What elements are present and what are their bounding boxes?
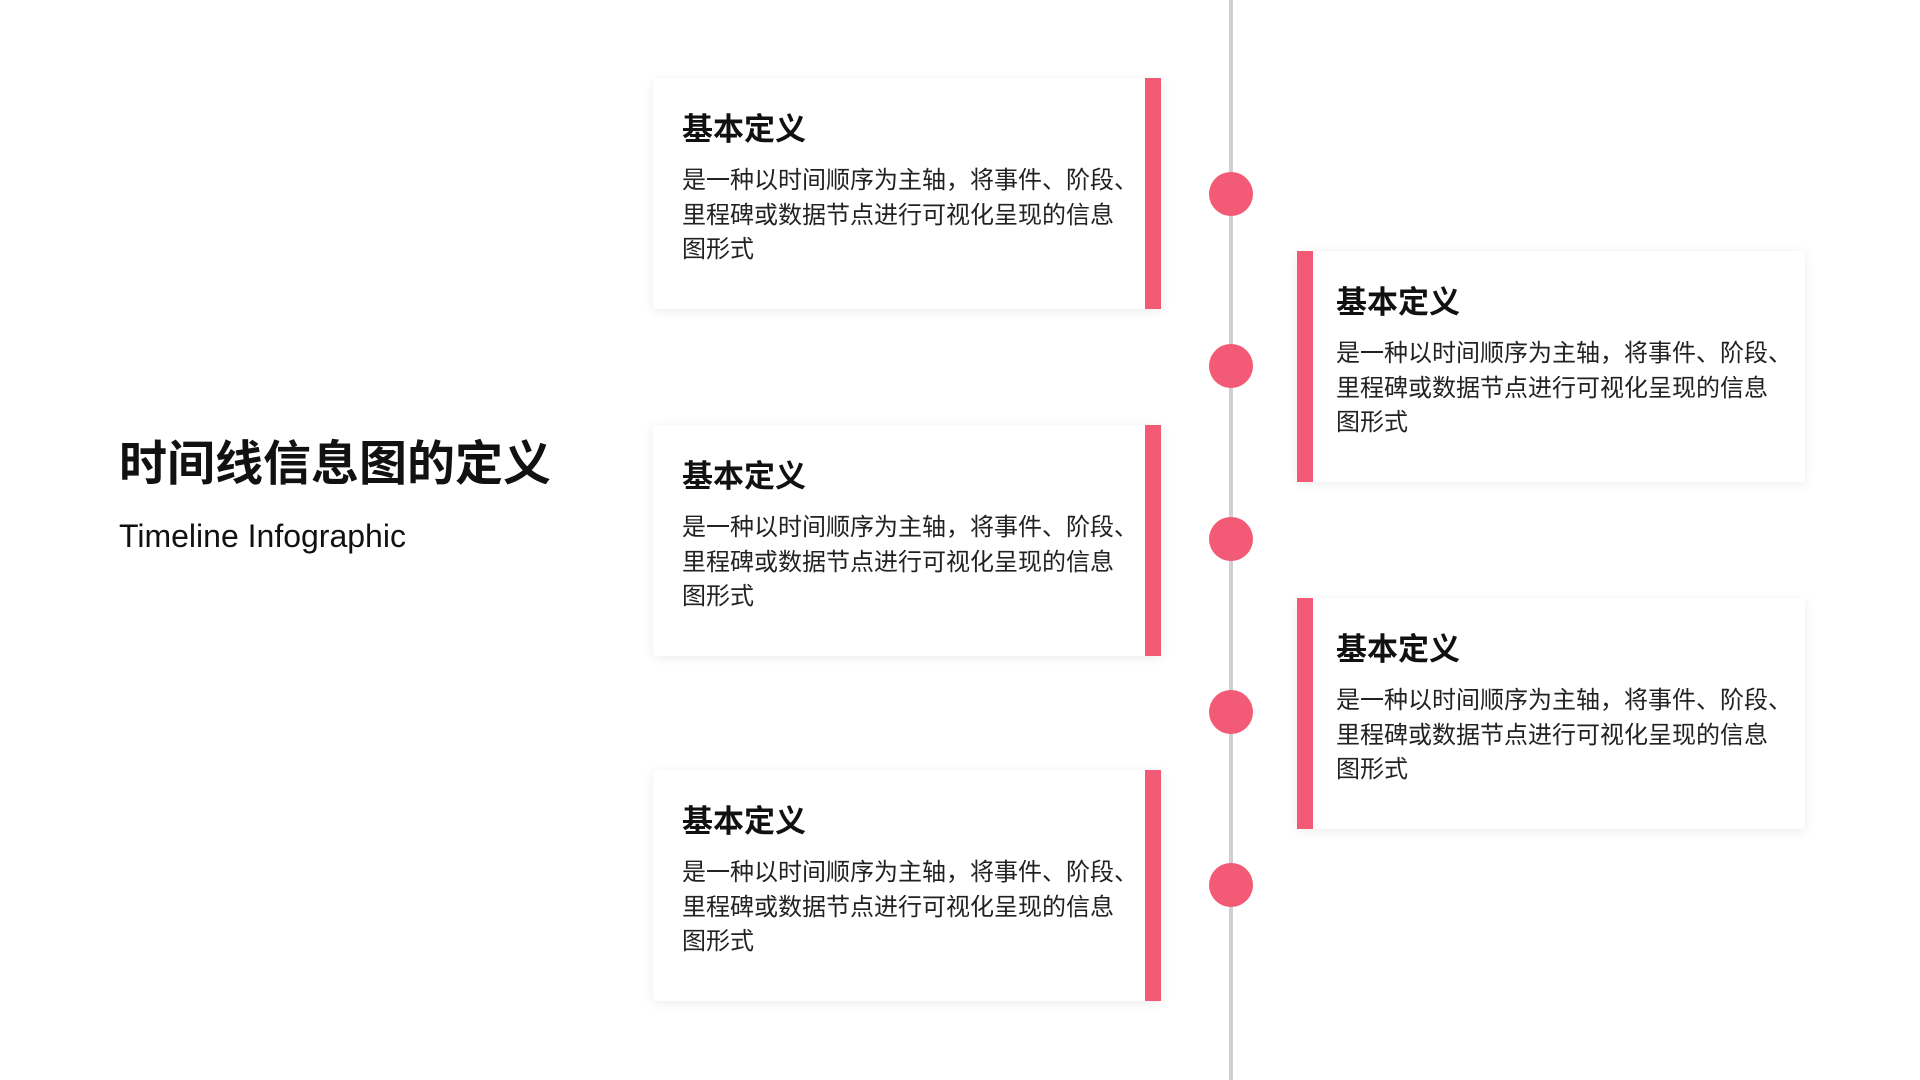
card 3: 基本定义 [682,459,806,494]
card 2: 图形式 [1336,409,1408,436]
card 4 [1297,598,1805,829]
dot 4 [1209,690,1253,734]
card 2 [1297,251,1805,482]
card 1: 是一种以时间顺序为主轴，将事件、阶段、 [682,167,1138,194]
card 4: 基本定义 [1336,632,1460,667]
card 5 [653,770,1161,1001]
subtitle: Timeline Infographic [119,518,406,554]
card 2: 里程碑或数据节点进行可视化呈现的信息 [1336,374,1768,402]
card 4: 图形式 [1336,756,1408,783]
card 2: 是一种以时间顺序为主轴，将事件、阶段、 [1336,340,1792,367]
timeline axis [1229,0,1233,1080]
card 3: 里程碑或数据节点进行可视化呈现的信息 [682,548,1114,576]
card 5: 基本定义 [682,804,806,839]
card 1: 里程碑或数据节点进行可视化呈现的信息 [682,202,1114,228]
title: 时间线信息图的定义 [119,438,551,491]
card 1 [653,78,1161,309]
dot 5 [1209,863,1253,907]
dot 2 [1209,344,1253,388]
card 1: 图形式 [682,236,754,263]
card 2: 基本定义 [1336,285,1460,320]
card 3 [653,425,1161,656]
card 4: 里程碑或数据节点进行可视化呈现的信息 [1336,722,1768,748]
card 1: 基本定义 [682,112,806,147]
card 3: 是一种以时间顺序为主轴，将事件、阶段、 [682,514,1138,541]
card 5: 是一种以时间顺序为主轴，将事件、阶段、 [682,859,1138,886]
card 3: 图形式 [682,583,754,610]
card 5: 图形式 [682,928,754,955]
dot 1 [1209,172,1253,216]
dot 3 [1209,517,1253,561]
card 5: 里程碑或数据节点进行可视化呈现的信息 [682,894,1114,920]
card 4: 是一种以时间顺序为主轴，将事件、阶段、 [1336,687,1792,714]
